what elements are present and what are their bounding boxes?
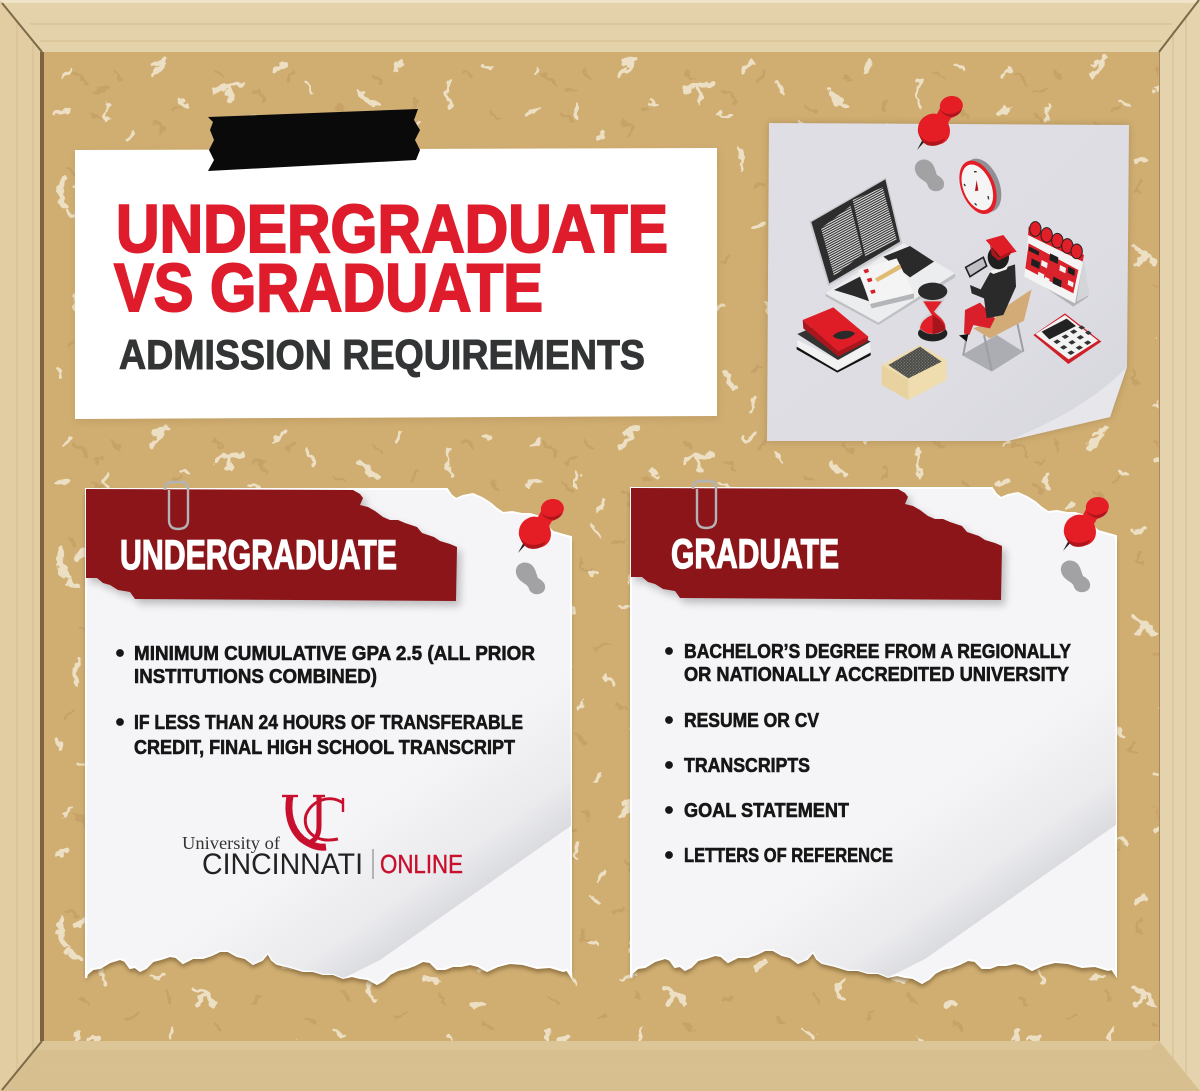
logo: University of Cincinnati Online: ONLINE: [380, 851, 463, 879]
requirement list: IF LESS THAN 24 HOURS OF TRANSFERABLE: [134, 712, 523, 734]
requirement list: GOAL STATEMENT: [684, 800, 849, 822]
heading: graduate: GRADUATE: [671, 530, 839, 577]
folded corner: [1007, 367, 1127, 441]
icon: paper clip: [165, 482, 188, 529]
requirement list: MINIMUM CUMULATIVE GPA 2.5 (ALL PRIOR: [134, 643, 536, 665]
panel: graduate note: [631, 479, 1117, 987]
icon: push pin: [1061, 497, 1109, 592]
title: undergraduate vs graduate: [114, 191, 668, 326]
panel: undergraduate note: [86, 480, 572, 988]
requirement list: INSTITUTIONS COMBINED): [134, 666, 377, 688]
title card: [75, 109, 718, 422]
requirement list: [665, 641, 1072, 867]
paper crease shading: [247, 733, 571, 978]
icon: calculator: [1033, 313, 1101, 364]
icon: desk calendar: [1024, 222, 1089, 307]
graduate paper sheet: [631, 479, 1117, 987]
icon: hourglass: [918, 283, 947, 341]
logo: University of Cincinnati Online: CINCINNATI: [202, 848, 363, 881]
icon: graduate student: [959, 235, 1017, 342]
icon: laptop: [809, 177, 955, 325]
logo: University of Cincinnati Online: University of: [182, 833, 280, 853]
requirement list: RESUME OR CV: [684, 710, 820, 732]
pinned note with illustration: [767, 96, 1129, 441]
icon: red push pin: [915, 96, 963, 191]
requirement list: LETTERS OF REFERENCE: [684, 845, 893, 867]
banner shadow: [90, 494, 461, 606]
illustration: study scene: [797, 153, 1101, 400]
requirement list: [116, 643, 536, 759]
requirement list: CREDIT, FINAL HIGH SCHOOL TRANSCRIPT: [134, 737, 515, 759]
icon: chair: [962, 289, 1032, 372]
red heading banner: [86, 489, 457, 601]
icon: paper clip: [693, 481, 716, 528]
heading: undergraduate: UNDERGRADUATE: [120, 531, 397, 578]
title: undergraduate vs graduate: UNDERGRADUATE: [116, 191, 668, 267]
requirement list: TRANSCRIPTS: [684, 755, 810, 777]
title: undergraduate vs graduate: VS GRADUATE: [114, 250, 543, 326]
requirement list: OR NATIONALLY ACCREDITED UNIVERSITY: [684, 664, 1070, 686]
requirement list: BACHELOR’S DEGREE FROM A REGIONALLY: [684, 641, 1072, 663]
subtitle: ADMISSION REQUIREMENTS: [119, 331, 645, 378]
icon: clock: [952, 153, 1009, 220]
icon: wooden box: [882, 345, 947, 400]
logo: University of Cincinnati Online: [182, 796, 463, 881]
checklist: [858, 258, 914, 304]
icon: push pin: [516, 499, 564, 594]
tape: [208, 109, 420, 171]
icon: stacked books: [797, 307, 871, 373]
